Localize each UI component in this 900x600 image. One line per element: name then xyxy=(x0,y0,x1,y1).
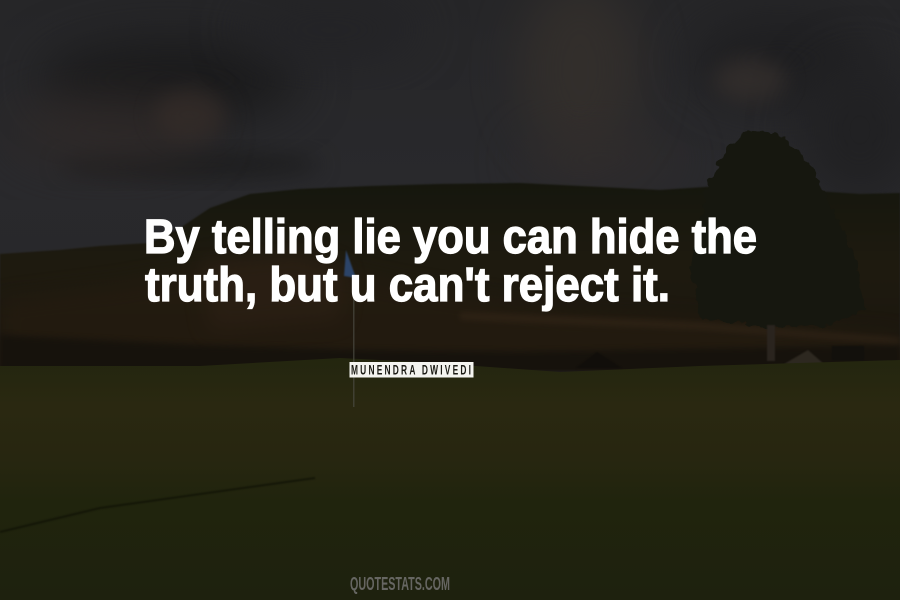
background: flag pole xyxy=(344,250,356,407)
quote text xyxy=(144,211,757,312)
background: distant huts xyxy=(576,346,864,368)
quote text: By telling lie you can hide the xyxy=(144,211,757,264)
author label: MUNENDRA DWIVEDI xyxy=(351,364,471,378)
source watermark: QUOTESTATS.COM xyxy=(350,574,450,594)
background: sky xyxy=(0,0,900,300)
background: wooded hills xyxy=(0,183,900,372)
background: large tree xyxy=(690,130,866,361)
background: golf fairway xyxy=(0,358,900,600)
quote text: truth, but u can't reject it. xyxy=(145,259,670,312)
